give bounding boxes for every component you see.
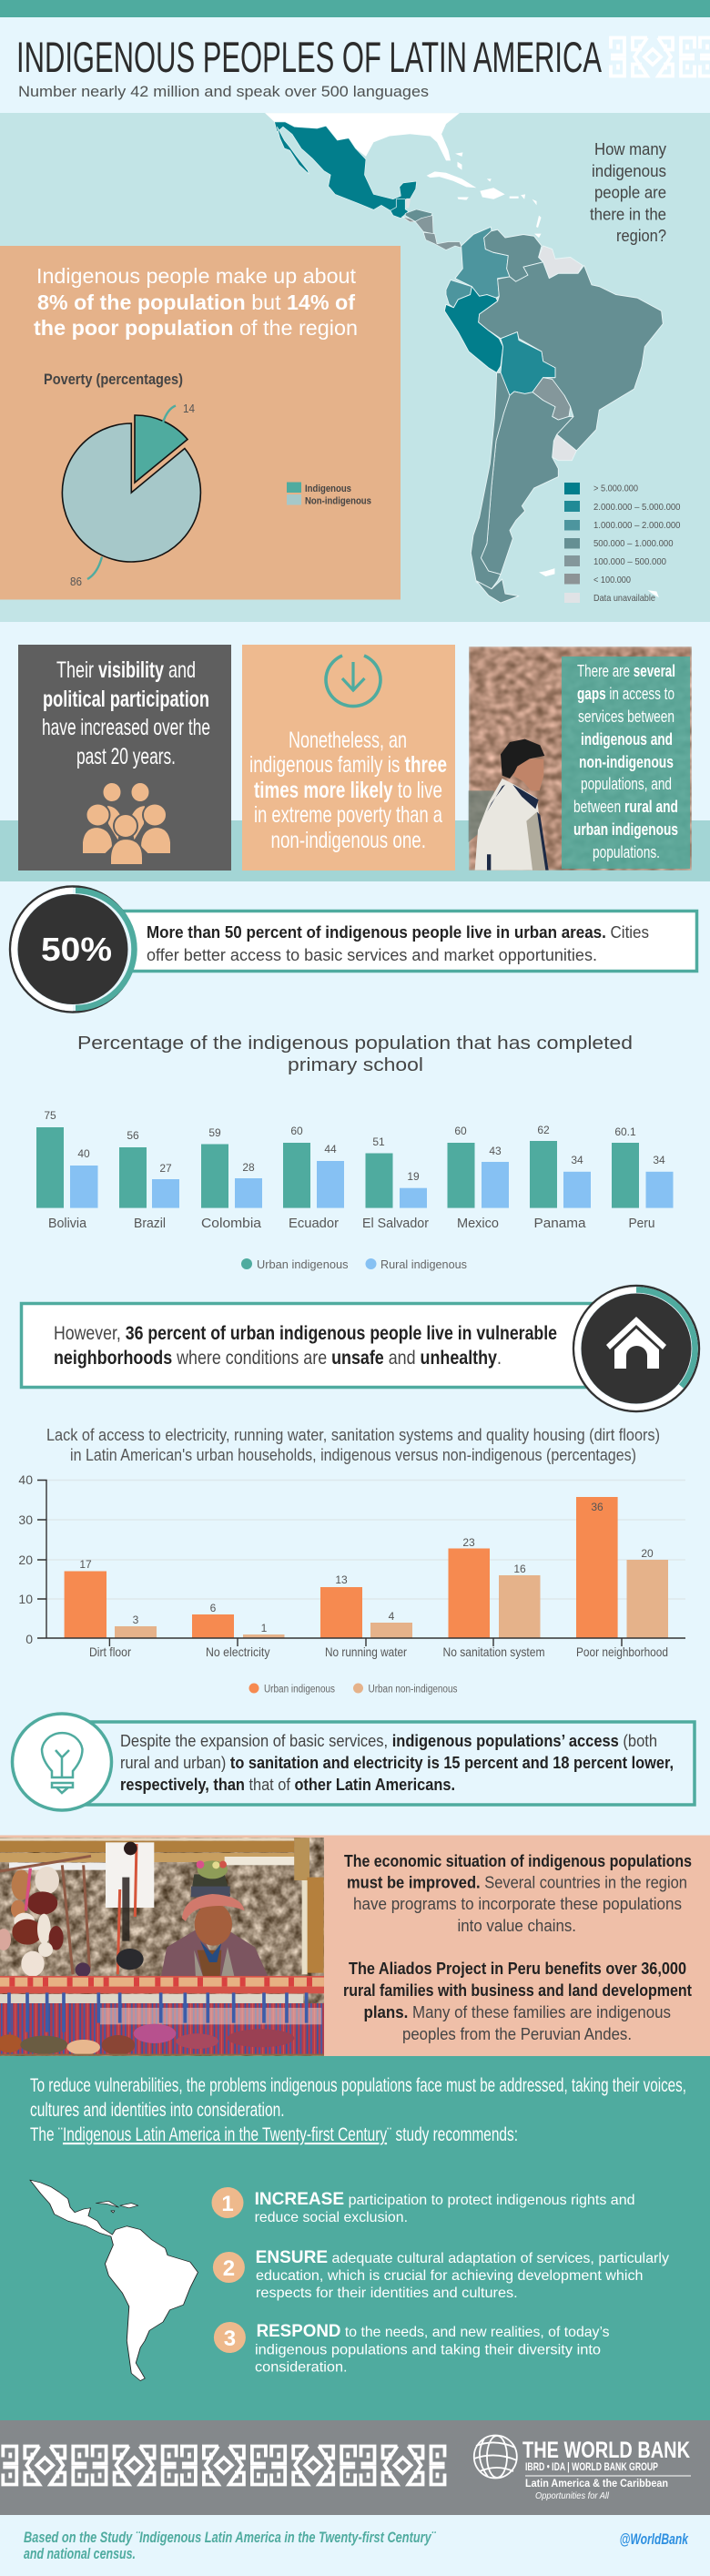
bar chart: access to services: 10 (18, 1592, 33, 1606)
icon: people (82, 782, 171, 865)
logo: World Bank: Opportunities for All (535, 2491, 610, 2501)
question text: there in the (590, 205, 666, 223)
recommendation 1: 1 (221, 2192, 234, 2216)
icon: lightbulb (42, 1733, 82, 1793)
map legend: 100.000 – 500.000 (593, 556, 666, 567)
chart legend: Rural indigenous (380, 1258, 467, 1271)
map: north and central America (265, 113, 659, 597)
pie chart: Poverty (percentages) (44, 372, 183, 388)
map legend: 500.000 – 1.000.000 (593, 538, 674, 549)
source note: Based on the Study ¨Indigenous Latin America in the Twenty-first Century¨ (24, 2529, 436, 2546)
footer key pattern (3, 2446, 445, 2484)
chart legend (249, 1683, 458, 1695)
callout text: Despite the expansion of basic services, indigenous populations’ access (both (120, 1731, 657, 1750)
chart legend: Urban non-indigenous (368, 1685, 458, 1695)
bar chart: access to services: 4 (389, 1610, 395, 1623)
callout: 50 percent urban (10, 887, 697, 1013)
bar chart: primary school: 43 (489, 1145, 502, 1157)
likelihood text: non-indigenous one. (271, 828, 426, 853)
source note: and national census. (24, 2545, 136, 2562)
source note (24, 2529, 436, 2562)
bar chart: access to services: 23 (462, 1536, 475, 1549)
map: white Latin America silhouette (30, 2180, 198, 2381)
house circle (573, 1286, 699, 1411)
bar chart: primary school: 44 (324, 1143, 337, 1156)
recommendation 3: indigenous populations and taking their diversity into (255, 2343, 601, 2358)
header decorative key pattern (611, 38, 710, 76)
bar chart: primary school: 40 (77, 1147, 90, 1160)
photo: man in front of city (469, 647, 692, 871)
callout text: offer better access to basic services and market opportunities. (147, 945, 597, 964)
bar chart: access to services: 20 (18, 1553, 33, 1567)
map legend: 1.000.000 – 2.000.000 (593, 520, 681, 531)
bar chart: access to services: 1 (261, 1622, 268, 1634)
map: south America (444, 227, 663, 603)
bar chart: access to services: 16 (513, 1563, 526, 1575)
pie chart: 14 (183, 402, 195, 415)
bar chart: primary school: 34 (571, 1154, 583, 1166)
recommendation 1 (211, 2187, 635, 2225)
recommendation 3: RESPOND to the needs, and new realities, of today’s (257, 2322, 610, 2341)
recommendation 3: 3 (224, 2327, 236, 2351)
gaps text overlay: non-indigenous (579, 752, 674, 771)
teal band (0, 820, 710, 881)
chart legend: Urban indigenous (257, 1258, 348, 1271)
callout text: However, 36 percent of urban indigenous people live in vulnerable (54, 1323, 557, 1344)
recommendation 3 (214, 2322, 610, 2375)
recommendation 2: ENSURE adequate cultural adaptation of services, particularly (256, 2248, 669, 2267)
economic situation text: must be improved. Several countries in the region (347, 1874, 687, 1892)
recommendation 2: respects for their identities and cultures. (256, 2286, 518, 2301)
panel statement (34, 264, 358, 340)
bar chart: primary school (36, 1109, 674, 1271)
chart legend (241, 1258, 467, 1271)
panel: map section (0, 113, 710, 622)
recommendation 1: reduce social exclusion. (255, 2210, 408, 2225)
bar chart: primary school: Bolivia (48, 1217, 87, 1231)
bar chart: primary school: 75 (44, 1109, 56, 1122)
50 percent circle: 50% (41, 931, 112, 968)
likelihood text: Nonetheless, an (289, 728, 407, 753)
bar chart: primary school: 60.1 (614, 1125, 636, 1138)
question text: How many (594, 140, 666, 158)
map legend: > 5.000.000 (593, 484, 638, 494)
pie legend (287, 483, 371, 506)
photo: weaver at loom (0, 1838, 324, 2056)
bar chart: primary school: Peru (628, 1217, 655, 1231)
visibility text: political participation (43, 687, 209, 712)
question text: region? (616, 227, 666, 245)
callout text: More than 50 percent of indigenous people live in urban areas. Cities (147, 922, 649, 942)
bar chart: primary school: El Salvador (362, 1217, 429, 1231)
bar chart: access to services: 17 (79, 1558, 92, 1571)
panel: economic situation (0, 1836, 710, 2056)
panel: photo with gaps text (469, 647, 692, 871)
recommendation 1: INCREASE participation to protect indigenous rights and (255, 2190, 635, 2209)
icon: house (606, 1317, 666, 1369)
pie legend: Indigenous (305, 484, 351, 494)
recommendation 2: education, which is crucial for achieving development which (256, 2268, 643, 2284)
economic situation text: plans. Many of these families are indigenous (364, 2003, 671, 2021)
map legend: < 100.000 (593, 575, 631, 585)
bar chart: primary school: Mexico (457, 1217, 499, 1231)
question text (590, 140, 666, 245)
heading: primary school chart: primary school (288, 1055, 423, 1075)
likelihood text: in extreme poverty than a (254, 802, 442, 828)
bar chart: access to services: No electricity (206, 1644, 269, 1659)
bar chart: primary school: Panama (533, 1217, 586, 1231)
visibility text: past 20 years. (76, 744, 176, 769)
recommendation 2: 2 (223, 2256, 235, 2281)
likelihood text: times more likely to live (254, 778, 442, 803)
callout text (147, 922, 649, 964)
bar chart: primary school: 56 (127, 1129, 139, 1142)
visibility text: Their visibility and (56, 657, 196, 683)
bar chart: access to services: No sanitation system (442, 1644, 544, 1659)
map legend: 2.000.000 – 5.000.000 (593, 502, 681, 513)
bar chart: access to services: 20 (641, 1547, 654, 1560)
logo: World Bank: Latin America & the Caribbean (525, 2479, 668, 2489)
50 percent circle (10, 887, 136, 1013)
bar chart: primary school: 34 (653, 1154, 665, 1166)
gaps text overlay: between rural and (573, 797, 678, 816)
bar chart: access to services: 40 (18, 1472, 33, 1487)
bar chart: access to services: 6 (210, 1602, 217, 1614)
bar chart: access to services: No running water (325, 1644, 407, 1659)
callout: basic services (13, 1714, 695, 1810)
panel: footer band (0, 2420, 710, 2515)
bar chart: primary school: 60 (454, 1125, 467, 1137)
economic situation text (343, 1852, 692, 2043)
heading: access chart: in Latin American's urban households, indigenous versus non-indigenous (percentages) (70, 1445, 636, 1464)
pie chart: 86 (70, 575, 82, 588)
panel: recommendations (0, 2056, 710, 2420)
gaps text overlay: gaps in access to (577, 684, 674, 703)
panel statement: 8% of the population but 14% of (37, 290, 355, 314)
map legend: Data unavailable (593, 593, 655, 604)
icon: down arrow in circle (326, 656, 380, 707)
gaps text overlay: services between (578, 707, 674, 726)
bar chart: primary school: 60 (290, 1125, 303, 1137)
economic situation text: into value chains. (457, 1917, 576, 1935)
callout text: respectively, than that of other Latin Americans. (120, 1775, 455, 1794)
callout text (54, 1323, 557, 1369)
question text: indigenous (592, 162, 666, 180)
gaps text overlay: populations, and (581, 774, 672, 793)
top teal bar (0, 0, 710, 17)
bar chart: access to services: 0 (25, 1632, 33, 1646)
bar chart: primary school: 19 (407, 1170, 420, 1183)
callout: vulnerable neighborhoods (22, 1286, 699, 1411)
bar chart: access to services (18, 1472, 685, 1695)
logo: World Bank: IBRD • IDA | WORLD BANK GROUP (525, 2462, 658, 2473)
gaps text overlay (562, 657, 690, 869)
visibility text: have increased over the (42, 715, 210, 740)
bar chart: primary school: Brazil (134, 1217, 166, 1231)
gaps text overlay: There are several (577, 661, 675, 680)
chart legend: Urban indigenous (264, 1685, 335, 1695)
intro text: The ¨Indigenous Latin America in the Twenty-first Century¨ study recommends: (30, 2123, 518, 2145)
bar chart: primary school: Colombia (201, 1217, 262, 1231)
bar chart: access to services: 36 (591, 1501, 604, 1513)
bar chart: primary school: Ecuador (289, 1217, 339, 1231)
bar chart: access to services: 30 (18, 1512, 33, 1527)
panel statement: Indigenous people make up about (36, 264, 357, 288)
bar chart: primary school: 51 (372, 1135, 385, 1148)
bar chart: access to services: Poor neighborhood (576, 1644, 668, 1659)
bar chart: primary school: 59 (208, 1126, 221, 1139)
callout text: neighborhoods where conditions are unsafe and unhealthy. (54, 1348, 502, 1369)
panel: poverty likelihood (242, 645, 455, 871)
pie chart (44, 372, 200, 588)
lightbulb circle (13, 1714, 111, 1810)
intro text (30, 2074, 686, 2145)
map legend (564, 483, 681, 604)
gaps text overlay: indigenous and (581, 729, 673, 748)
intro text: cultures and identities into consideration. (30, 2099, 284, 2121)
economic situation text: have programs to incorporate these populations (353, 1895, 682, 1913)
bar chart: primary school: 28 (242, 1161, 255, 1174)
bar chart: access to services: 3 (133, 1614, 139, 1626)
heading: primary school chart: Percentage of the indigenous population that has completed (77, 1033, 633, 1054)
bar chart: access to services: Dirt floor (89, 1644, 131, 1659)
panel: poverty (0, 246, 401, 599)
logo: World Bank (474, 2435, 691, 2501)
likelihood text: indigenous family is three (249, 752, 447, 778)
bar chart: access to services: 13 (335, 1573, 348, 1586)
callout text (120, 1731, 674, 1794)
bar chart: primary school: 27 (159, 1162, 172, 1175)
heading: primary school chart (77, 1033, 633, 1075)
pie legend: Non-indigenous (305, 495, 371, 506)
likelihood text (249, 728, 447, 853)
gaps text overlay: populations. (593, 842, 660, 861)
panel: visibility (18, 645, 231, 871)
panel statement: the poor population of the region (34, 316, 358, 340)
visibility text (42, 657, 210, 769)
heading: access chart (46, 1425, 660, 1464)
economic situation text: peoples from the Peruvian Andes. (402, 2025, 632, 2043)
recommendation 3: consideration. (255, 2359, 348, 2375)
subtitle: Number nearly 42 million and speak over 500 languages (18, 84, 429, 100)
icon: globe (474, 2435, 517, 2479)
question text: people are (594, 184, 666, 202)
bar chart: primary school: 62 (537, 1124, 550, 1136)
recommendation 2 (213, 2248, 669, 2301)
